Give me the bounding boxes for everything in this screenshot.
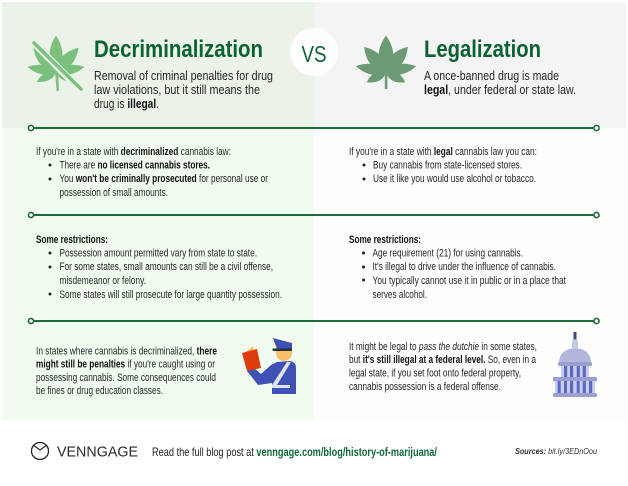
vs badge [290, 28, 338, 76]
text: legal restrictions [349, 234, 566, 301]
text: legal restrictions: It's illegal to drive under the influence of cannabis. [372, 261, 556, 273]
text: decriminalization definition [94, 68, 273, 111]
icon: cannabis leaf [355, 36, 417, 89]
text: decriminalized state rules: possession of small amounts. [60, 187, 168, 199]
text: legal restrictions: Age requirement (21) for using cannabis. [372, 248, 523, 260]
text: legal restrictions: Some restrictions: [349, 234, 421, 246]
text: sources: Sources: bit.ly/3EDnOou [515, 446, 597, 456]
text: decriminalized restrictions: Possession amount permitted vary from state to state. [60, 248, 257, 260]
heading: legalization: Legalization [424, 36, 541, 63]
panel: legalization body [314, 128, 626, 420]
icon: capitol building [553, 332, 597, 397]
text: legal federal note [349, 341, 537, 393]
text: legalization definition [424, 68, 576, 97]
text: decriminalization definition: Removal of criminal penalties for drug [94, 68, 273, 83]
icon: police officer reading a book [242, 338, 296, 394]
text: decriminalized restrictions: misdemeanor or felony. [60, 275, 146, 287]
text: decriminalized state rules: There are no licensed cannabis stores. [60, 160, 210, 172]
divider line 3 [28, 318, 599, 324]
vs badge: VS [302, 41, 326, 67]
divider line 1 [28, 125, 599, 131]
text: legal state rules: If you're in a state with legal cannabis law you can: [349, 146, 537, 158]
text: decriminalization definition: law violations, but it still means the [94, 82, 260, 97]
text: decriminalized restrictions: Some restrictions: [36, 234, 108, 246]
text: legal state rules [349, 146, 537, 185]
text: decriminalized state rules: If you're in a state with decriminalized cannabis law: [36, 146, 231, 158]
text: legal federal note: but it's still illegal at a federal level. So, even in a [349, 354, 536, 366]
text: legalization definition: A once-banned drug is made [424, 68, 559, 83]
text: decriminalized penalties note: be fines or drug education classes. [36, 385, 163, 397]
text: decriminalized state rules [36, 146, 268, 199]
text: decriminalized penalties note: possessing cannabis. Some consequences could [36, 372, 216, 384]
text: decriminalized state rules: You won't be criminally prosecuted for personal use or [60, 173, 268, 185]
text: legal state rules: Buy cannabis from state-licensed stores. [373, 160, 522, 172]
text: decriminalized restrictions [36, 234, 282, 301]
panel: decriminalization body [2, 128, 314, 420]
heading: decriminalization: Decriminalization [94, 36, 263, 63]
panel: decriminalization header [2, 2, 314, 128]
text: legal federal note: cannabis possession is a federal offense. [349, 381, 501, 393]
text: decriminalized restrictions: For some states, small amounts can still be a civil offense, [60, 261, 273, 273]
text: decriminalized penalties note [36, 346, 217, 397]
text: legal state rules: Use it like you would use alcohol or tobacco. [373, 173, 536, 185]
logo: venngage: VENNGAGE [57, 444, 138, 460]
text: legal restrictions: serves alcohol. [372, 289, 427, 301]
text: decriminalized penalties note: might still be penalties if you're caught using or [36, 358, 215, 370]
panel: legalization header [314, 2, 626, 128]
divider line 2 [28, 212, 599, 218]
text: legal federal note: legal state, if you set foot onto federal property, [349, 368, 521, 380]
text: legal federal note: It might be legal to pass the dutchie in some states, [349, 341, 537, 353]
text: blog link: Read the full blog post at venngage.com/blog/history-of-marijuana/ [152, 445, 438, 459]
logo: venngage [32, 442, 138, 460]
text: legal restrictions: You typically cannot use it in public or in a place that [372, 275, 566, 287]
text: decriminalized penalties note: In states where cannabis is decriminalized, there [36, 346, 217, 358]
icon: crossed-out cannabis leaf [27, 36, 85, 91]
text: legalization definition: legal, under federal or state law. [424, 82, 576, 97]
text: decriminalization definition: drug is illegal. [94, 96, 159, 111]
text: decriminalized restrictions: Some states will still prosecute for large quantity possession. [60, 289, 282, 301]
